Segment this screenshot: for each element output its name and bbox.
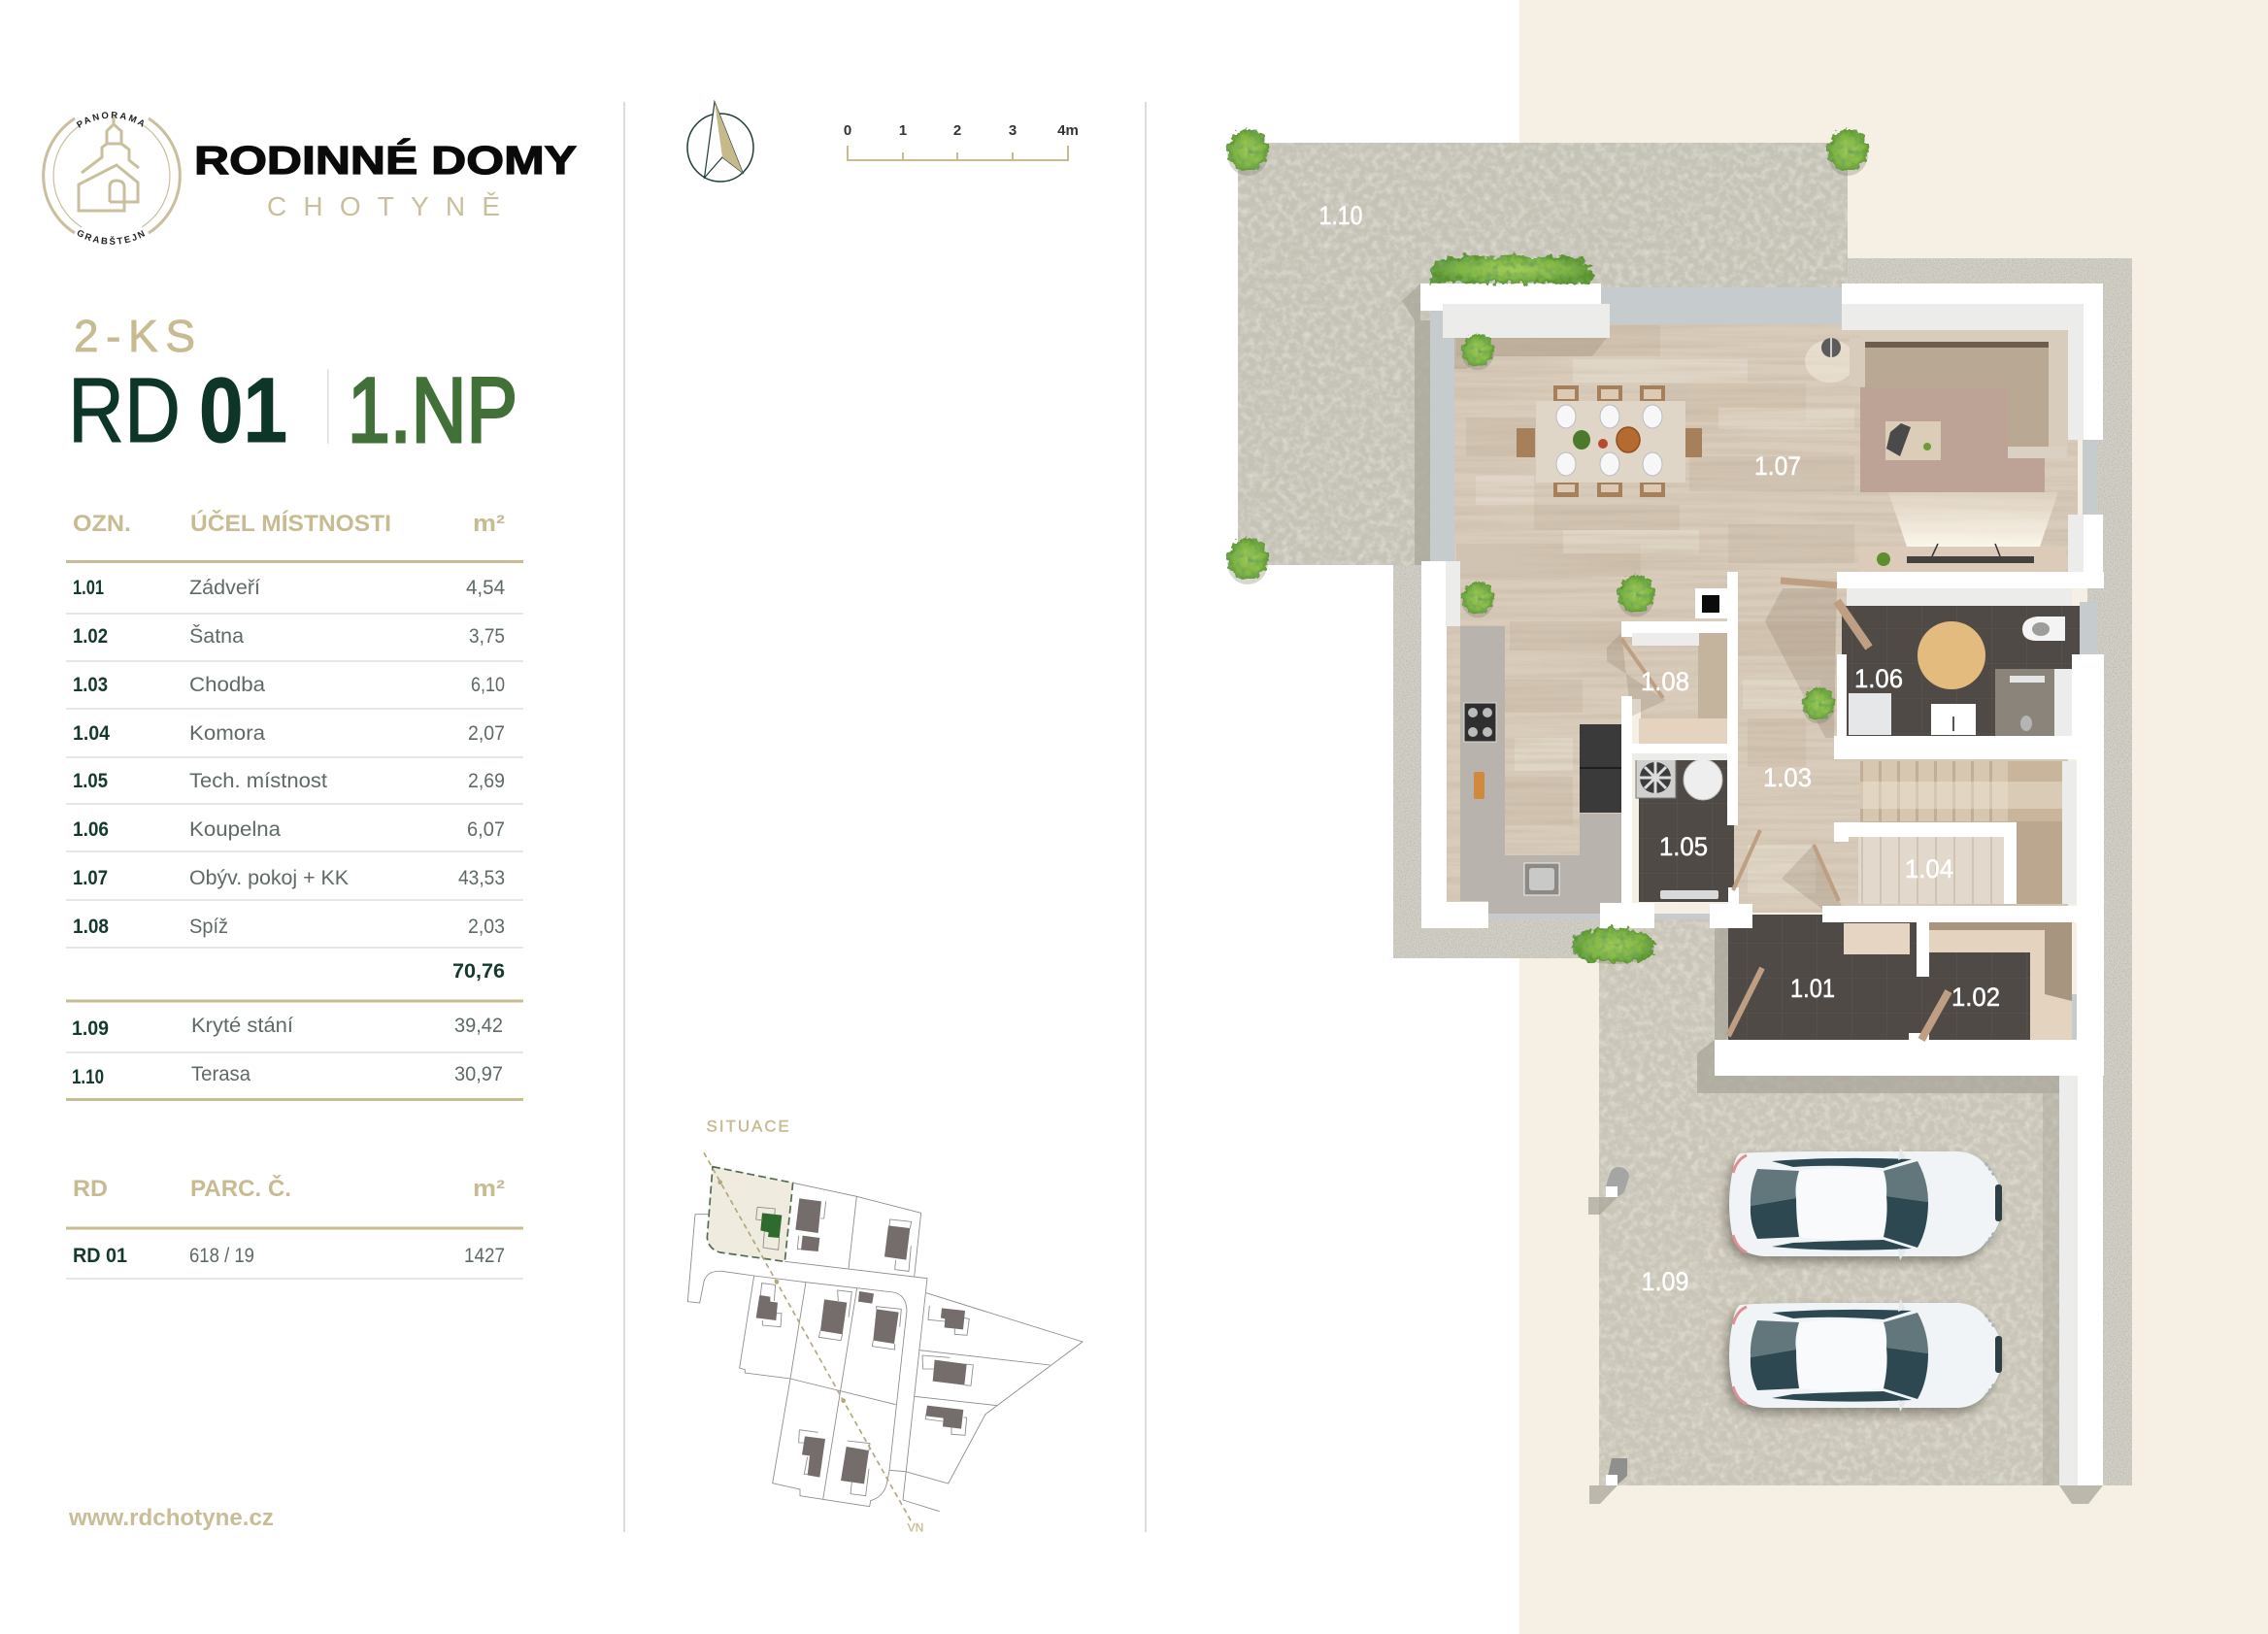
kitchen counter [1460,626,1621,914]
coffee table [1885,421,1941,460]
tree bottom left [1227,538,1268,584]
room areas [454,577,505,1085]
room 1.01 1.02 floor [1728,915,2072,1041]
column dividers [624,102,1146,1532]
room labels: 1.01 [1790,974,1835,1003]
basin [1931,704,1976,735]
parcel row: 618 / 19 [189,1245,254,1267]
panel: dark tile rooms [1639,606,2080,1041]
logo ring [44,118,180,233]
panel: built-in cabinets [1639,633,2072,1050]
room areas: 2,69 [468,770,505,792]
logo arc text: GRABŠTEJN [78,230,146,245]
room labels: 1.09 [1641,1267,1689,1296]
light patches [1805,340,2058,547]
situation map [687,1117,1083,1535]
room names: Komora [189,722,265,745]
bollards [1604,1165,1631,1485]
parcel header: PARC. Č. [190,1175,291,1202]
scale bar [844,122,1079,160]
room names: Chodba [189,674,265,696]
scale labels: 4m [1057,122,1079,139]
floor shadows [1454,338,1845,913]
parcel header: m² [473,1176,505,1202]
parcel header [73,1175,505,1202]
shower [1995,669,2054,736]
panel: wood floor [1447,320,2078,913]
plants [1227,129,1868,964]
room names: Kryté stání [191,1015,293,1037]
chimney [1695,588,1727,618]
room names: Šatna [189,625,244,648]
fruit tray [1474,772,1484,799]
wardrobe [1927,915,2072,1050]
house type label: 2-KS [74,311,195,361]
food bowls [1573,427,1640,452]
car 1 [1725,1148,2002,1262]
room areas: 6,10 [471,674,505,696]
brand name: RODINNÉ DOMY [194,138,577,183]
panel: bathroom fixtures [1849,617,2065,736]
cars [1725,1148,2002,1414]
room labels: 1.05 [1659,832,1708,861]
logo church [79,117,139,211]
room 1.06 floor [1842,606,2080,736]
room areas: 6,07 [467,818,505,841]
logo [42,112,577,245]
radiator [1660,890,1718,899]
wall shadows outside [1402,283,2103,1504]
room areas: 2,07 [468,722,505,745]
fridge [1580,724,1621,813]
table header [73,510,505,537]
parcel rules [66,1228,523,1279]
treads [1860,761,2008,821]
TV cabinet [1859,544,2066,572]
power line VN [704,1152,911,1521]
heading divider [327,369,328,444]
room labels: 1.08 [1641,667,1689,696]
house id: 01 [199,359,287,462]
round rug [1918,621,1985,689]
room ids: 1.09 [72,1017,109,1040]
scale labels: 2 [953,122,961,139]
room ids: 1.05 [73,770,108,792]
toilet [2022,617,2065,641]
VN label: VN [908,1521,923,1535]
house id [68,359,287,462]
panel: stairs [1858,761,2062,904]
rug [1860,387,2045,492]
room labels: 1.06 [1854,664,1903,693]
plant lower wall [1462,582,1493,617]
room labels: 1.03 [1763,763,1812,792]
robot vacuum lamp [1821,338,1841,357]
scale labels: 0 [844,122,851,139]
car 2 [1725,1299,2002,1414]
table rules [66,561,523,1099]
room areas: 39,42 [454,1015,503,1037]
room names [189,577,349,1085]
selected house [760,1213,782,1238]
table header: OZN. [73,511,131,537]
room names: Obýv. pokoj + KK [189,867,349,889]
doors [1621,581,1949,1040]
room labels [1318,201,2000,1296]
room names: Spíž [189,916,228,938]
room areas: 4,54 [466,577,505,599]
pantry cabinet [1639,633,1727,744]
scale labels [844,122,1079,139]
wood planks [1456,325,1854,825]
sofa [1850,330,2068,458]
planter hedge [1430,255,1593,283]
room table [66,510,523,1099]
panel: white walls [1420,283,2104,1485]
room labels: 1.02 [1951,983,2000,1012]
room names: Tech. místnost [189,770,327,792]
cream plan background [1519,0,2268,1634]
parcel row [73,1245,505,1267]
room areas: 43,53 [458,867,505,889]
room areas: 2,03 [468,916,505,938]
room 1.05 floor [1639,760,1734,902]
parcel lines [687,1183,1083,1512]
gravel [1393,258,2132,1485]
brand place: CHOTYNĚ [267,191,500,221]
lit band [1860,782,2062,809]
room ids: 1.01 [73,577,104,599]
hall plant [1803,687,1834,723]
other houses [756,1198,967,1484]
panel: glass and wall faces [1430,287,2097,1485]
house id: RD [68,359,181,462]
floor plan [1227,129,2132,1504]
parcel header: RD [73,1176,108,1202]
scale labels: 3 [1009,122,1017,139]
parcel row: 1427 [464,1245,505,1267]
panel: parking 1.09 [1599,917,2068,1485]
stove [1464,703,1496,742]
room ids: 1.10 [72,1066,104,1088]
room names: Koupelna [189,818,281,841]
room ids [72,577,110,1088]
panel: room 1.07 furniture [1517,330,2068,572]
logo arc text: PANORAMA [76,112,144,128]
panel: kitchen [1460,626,1621,914]
parcel row: RD 01 [73,1245,127,1267]
logo arc text [76,112,146,245]
lower stairs 1.04 [1858,835,2004,904]
palm [1618,575,1654,617]
room labels: 1.10 [1318,201,1363,230]
room ids: 1.08 [73,916,109,938]
highlighted parcel [707,1167,793,1261]
water tank [1684,759,1722,800]
floor label: 1.NP [348,359,517,462]
washer [1849,693,1891,735]
tree top right [1827,129,1868,176]
plant by wall [1462,334,1493,370]
total area: 70,76 [452,960,505,983]
room areas: 30,97 [454,1063,503,1085]
boiler fan [1636,758,1676,798]
room labels: 1.04 [1905,854,1953,884]
dining table [1517,385,1702,497]
icon: north arrow [687,102,753,182]
room ids: 1.07 [73,867,108,889]
entrance shrubs [1573,928,1654,964]
table header: ÚČEL MÍSTNOSTI [190,510,391,537]
tree top left [1227,129,1268,176]
room names: Zádveří [189,577,260,599]
situation heading: SITUACE [707,1117,789,1136]
room ids: 1.03 [73,674,108,696]
table header: m² [473,511,505,537]
sink [1524,863,1559,895]
panel: utility equipment [1636,758,1722,899]
room areas: 3,75 [469,625,505,648]
room ids: 1.04 [73,722,110,745]
room ids: 1.02 [73,625,108,648]
scale labels: 1 [899,122,907,139]
parcel table [66,1175,523,1279]
plates [1556,405,1662,476]
website: www.rdchotyne.cz [68,1505,274,1531]
room ids: 1.06 [73,818,109,841]
room names: Terasa [191,1063,250,1085]
chairs [1517,385,1702,497]
wood grain [1447,320,2078,913]
room labels: 1.07 [1754,451,1801,481]
small cabinet [1844,923,1910,954]
panel: terrace 1.10 [1238,143,1848,565]
